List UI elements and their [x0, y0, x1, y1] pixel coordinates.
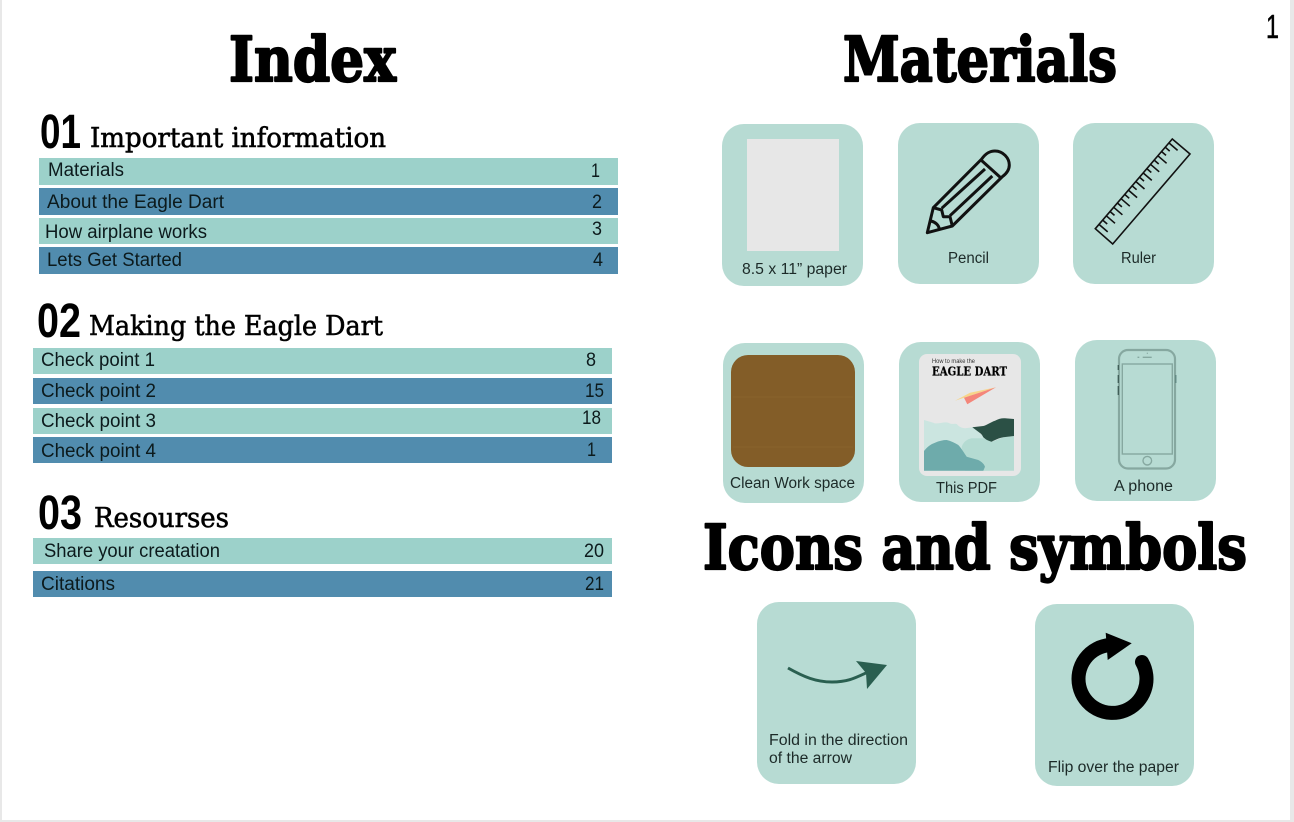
row: About the Eagle Dart	[39, 188, 618, 215]
icon: PDF cover thumbnail: EAGLE DART	[932, 365, 1007, 379]
panel: section 01 important information	[39, 106, 618, 274]
row: Share your creatation: 20	[584, 541, 604, 562]
card: ruler	[1073, 123, 1214, 284]
card: flip over the paper: Flip over the paper	[1048, 759, 1179, 776]
card: fold in the direction of the arrow: of the arrow	[769, 750, 853, 767]
row: Check point 2	[33, 378, 612, 404]
row: Check point 1	[33, 348, 612, 374]
row: Check point 3: Check point 3	[41, 411, 156, 432]
row: Check point 1: 8	[586, 350, 596, 371]
icon: PDF cover thumbnail	[919, 354, 1021, 476]
row: Check point 1: Check point 1	[41, 350, 155, 371]
row: Lets Get Started	[39, 247, 618, 274]
row: Lets Get Started: Lets Get Started	[47, 250, 182, 271]
row: About the Eagle Dart: About the Eagle Dart	[47, 192, 225, 213]
panel: section 02 making the eagle dart	[33, 295, 612, 463]
section number 03: 03	[38, 487, 82, 540]
row: Materials	[39, 158, 618, 185]
row: Citations	[33, 571, 612, 597]
icon: curved fold arrow	[788, 661, 887, 689]
icon: ruler	[1095, 139, 1190, 244]
row: How airplane works: 3	[592, 219, 602, 240]
card: paper: 8.5 x 11” paper	[742, 261, 847, 278]
row: Materials: 1	[591, 161, 600, 182]
section heading: Important information	[90, 122, 386, 154]
card: a phone	[1075, 340, 1216, 501]
row: Lets Get Started: 4	[593, 250, 603, 271]
section number 01: 01	[40, 106, 81, 159]
panel: section 03 resources	[33, 487, 612, 597]
icon: pencil	[927, 151, 1009, 233]
icon: circular flip arrow	[1079, 633, 1147, 713]
section number 02: 02	[37, 295, 81, 348]
icon: wood surface	[731, 355, 855, 467]
row: Citations: Citations	[41, 574, 115, 595]
section heading: Making the Eagle Dart	[89, 310, 383, 342]
row: How airplane works: How airplane works	[45, 222, 207, 243]
icon: phone outline	[1118, 350, 1176, 468]
title: Index: Index	[229, 23, 397, 96]
row: About the Eagle Dart: 2	[592, 192, 602, 213]
card: paper	[722, 124, 863, 286]
card: this PDF: This PDF	[936, 480, 997, 497]
row: Citations: 21	[585, 574, 604, 595]
row: Check point 2: 15	[585, 381, 604, 402]
row: Share your creatation: Share your creatation	[44, 541, 220, 562]
row: Check point 4: Check point 4	[41, 441, 156, 462]
card: clean work space: Clean Work space	[730, 475, 855, 492]
card: pencil: Pencil	[948, 250, 989, 267]
card: this PDF	[899, 342, 1040, 502]
section heading: Resourses	[94, 502, 229, 534]
row: Materials: Materials	[48, 160, 124, 181]
row: Check point 2: Check point 2	[41, 381, 156, 402]
page number: 1	[1266, 8, 1279, 45]
card: ruler: Ruler	[1121, 250, 1156, 267]
row: Check point 3: 18	[582, 408, 601, 429]
card: fold in the direction of the arrow	[757, 602, 916, 784]
row: Share your creatation	[33, 538, 612, 564]
card: pencil	[898, 123, 1039, 284]
row: How airplane works	[39, 218, 618, 244]
card: flip over the paper	[1035, 604, 1194, 786]
card: a phone: A phone	[1114, 478, 1173, 495]
row: Check point 3	[33, 408, 612, 434]
card: fold in the direction of the arrow: Fold in the direction	[769, 732, 908, 749]
icon: blank paper sheet	[747, 139, 839, 251]
icon: PDF cover thumbnail: How to make the	[932, 358, 975, 365]
row: Check point 4: 1	[587, 440, 596, 461]
card: clean work space	[723, 343, 864, 503]
title: Materials: Materials	[843, 23, 1117, 96]
row: Check point 4	[33, 437, 612, 463]
